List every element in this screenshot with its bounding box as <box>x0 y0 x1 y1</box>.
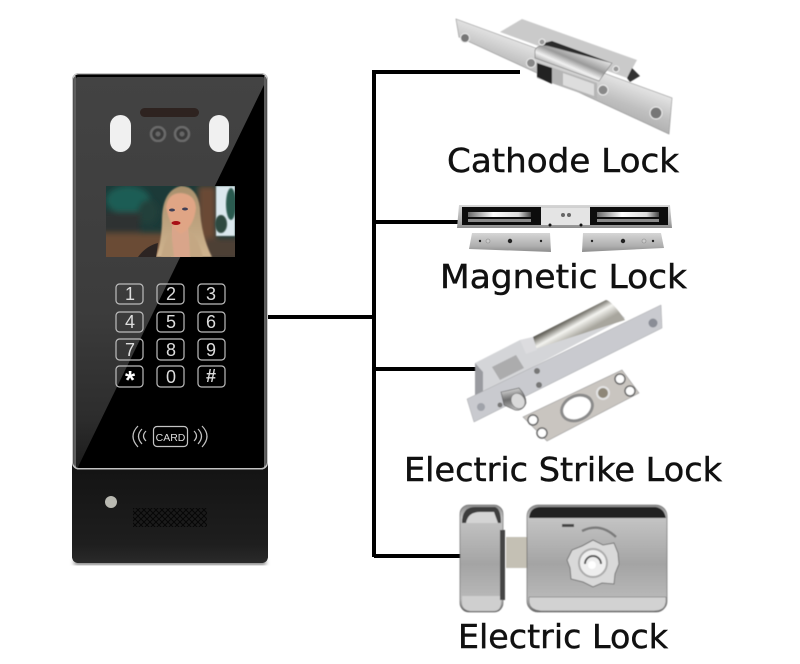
left light window <box>110 115 131 152</box>
keypad: 9 <box>206 340 216 360</box>
connector wiring <box>268 70 520 557</box>
keypad: 5 <box>166 312 176 332</box>
label: Magnetic Lock: Magnetic Lock <box>440 257 688 296</box>
keypad: 8 <box>166 340 176 360</box>
icon: magnetic lock <box>457 205 672 252</box>
icon: cathode lock <box>456 19 672 134</box>
card reader symbol: CARD <box>156 432 186 444</box>
hair <box>156 186 212 257</box>
status LED <box>105 496 117 508</box>
keypad <box>116 284 225 395</box>
label: Electric Lock: Electric Lock <box>458 617 669 656</box>
keypad: # <box>206 366 216 386</box>
label: Electric Strike Lock: Electric Strike Lock <box>404 450 723 489</box>
card reader symbol <box>133 426 207 447</box>
keypad: 3 <box>206 284 216 304</box>
keypad: 2 <box>166 284 176 304</box>
face <box>166 193 196 234</box>
keypad: 4 <box>125 312 135 332</box>
keypad: 0 <box>166 367 176 387</box>
glass reflection <box>76 77 264 467</box>
keypad: 6 <box>206 312 216 332</box>
label: Cathode Lock: Cathode Lock <box>447 141 680 180</box>
right light window <box>209 115 229 152</box>
keypad: * <box>125 365 136 395</box>
lower housing <box>72 470 268 563</box>
keypad: 7 <box>125 340 135 360</box>
icon: electric lock <box>460 505 667 612</box>
neck <box>171 226 191 257</box>
IR sensor bar <box>140 108 199 117</box>
speaker grille <box>133 508 207 527</box>
glass panel border <box>75 76 265 469</box>
icon: electric strike lock <box>467 300 662 441</box>
screen with portrait <box>106 186 235 257</box>
intercom device panel <box>72 73 268 565</box>
keypad: 1 <box>125 284 135 304</box>
dual cameras <box>151 127 189 141</box>
